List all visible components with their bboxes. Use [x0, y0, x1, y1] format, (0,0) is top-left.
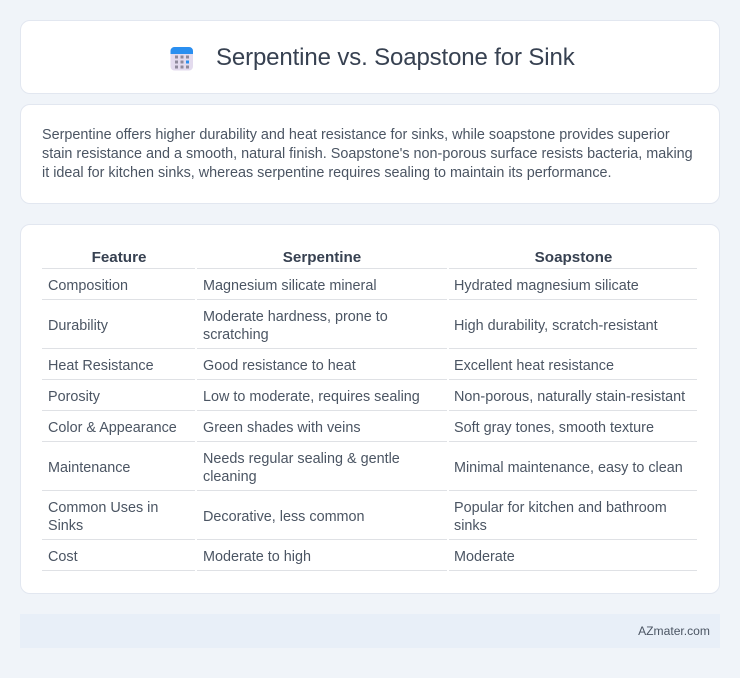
row: cost: Moderate to high — [203, 549, 311, 565]
table panel — [20, 224, 720, 594]
row: porosity: Non-porous, naturally stain-resistant — [454, 389, 685, 405]
row: porosity — [48, 389, 686, 405]
row: heat resistance — [48, 358, 614, 374]
row: common uses in sinks: Popular for kitchen and bathroom — [454, 500, 667, 516]
row: common uses in sinks — [48, 500, 667, 534]
row: heat resistance: Heat Resistance — [48, 358, 154, 374]
summary panel — [20, 104, 720, 204]
row: porosity: Porosity — [48, 389, 100, 405]
table headers: Serpentine — [283, 249, 361, 266]
summary text: stain resistance and a smooth, natural finish. Soapstone's non-porous surface resists bacteria, making — [42, 146, 693, 162]
row: common uses in sinks: sinks — [454, 518, 487, 534]
row: maintenance — [48, 451, 683, 485]
summary text: it ideal for kitchen sinks, whereas serpentine requires sealing to maintain its performance. — [42, 165, 612, 181]
row: composition: Composition — [48, 278, 128, 294]
row: cost — [48, 549, 515, 565]
row: durability — [48, 309, 658, 343]
row: durability: Moderate hardness, prone to — [203, 309, 388, 325]
title: Serpentine vs. Soapstone for Sink — [216, 44, 575, 71]
table headers: Soapstone — [535, 249, 612, 266]
summary text — [42, 127, 693, 181]
table headers — [92, 249, 612, 266]
row: cost: Cost — [48, 549, 78, 565]
row: composition: Hydrated magnesium silicate — [454, 278, 639, 294]
header panel — [20, 20, 720, 94]
icon: calendar — [170, 47, 193, 70]
row: common uses in sinks: Decorative, less common — [203, 509, 365, 525]
row: color and appearance: Color & Appearance — [48, 420, 177, 436]
row: maintenance: Needs regular sealing & gentle — [203, 451, 400, 467]
row: durability: High durability, scratch-resistant — [454, 318, 658, 334]
footer credit: AZmater.com — [638, 624, 710, 638]
row: common uses in sinks: Sinks — [48, 518, 83, 534]
row: cost: Moderate — [454, 549, 515, 565]
row: color and appearance: Green shades with veins — [203, 420, 361, 436]
row: heat resistance: Excellent heat resistance — [454, 358, 614, 374]
row: heat resistance: Good resistance to heat — [203, 358, 356, 374]
footer bar — [20, 614, 720, 648]
row: maintenance: Maintenance — [48, 460, 130, 476]
row: common uses in sinks: Common Uses in — [48, 500, 158, 516]
row: maintenance: Minimal maintenance, easy to clean — [454, 460, 683, 476]
comparison table — [42, 249, 697, 571]
row: color and appearance: Soft gray tones, smooth texture — [454, 420, 654, 436]
row: composition — [48, 278, 639, 294]
row: composition: Magnesium silicate mineral — [203, 278, 377, 294]
row: color and appearance — [48, 420, 654, 436]
summary text: Serpentine offers higher durability and heat resistance for sinks, while soapstone provides superior — [42, 127, 670, 143]
row: durability: Durability — [48, 318, 108, 334]
row: maintenance: cleaning — [203, 469, 257, 485]
row: porosity: Low to moderate, requires sealing — [203, 389, 420, 405]
row: durability: scratching — [203, 327, 269, 343]
table headers: Feature — [92, 249, 146, 266]
